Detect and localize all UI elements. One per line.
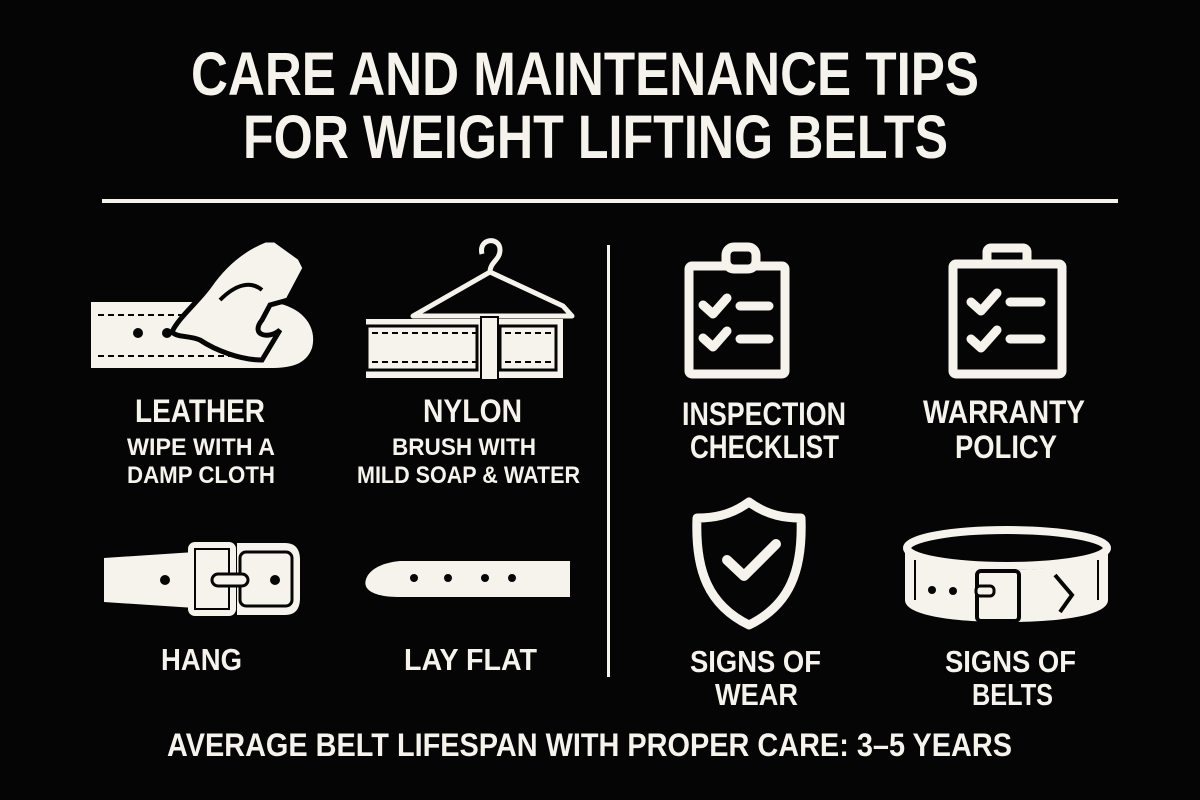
label: signs of wear <box>690 644 821 712</box>
icon: belt with buckle <box>104 543 300 615</box>
panel: signs of belts <box>905 530 1108 712</box>
panel: nylon <box>357 241 580 489</box>
label: warranty policy: WARRANTY <box>923 394 1085 430</box>
text: wipe with a damp cloth: WIPE WITH A <box>127 434 275 461</box>
title: CARE AND MAINTENANCE TIPS <box>191 40 979 108</box>
label: warranty policy <box>923 394 1085 465</box>
title <box>191 40 979 171</box>
label: nylon: NYLON <box>423 393 522 429</box>
icon: shield with check <box>697 502 801 625</box>
label: signs of belts: SIGNS OF <box>945 644 1076 679</box>
icon: belt with hand wiping <box>91 240 313 368</box>
panel: inspection checklist <box>682 247 846 465</box>
label: leather: LEATHER <box>135 393 265 429</box>
label: inspection checklist: CHECKLIST <box>690 429 839 465</box>
text: wipe with a damp cloth <box>127 434 275 489</box>
text: wipe with a damp cloth: DAMP CLOTH <box>127 462 275 489</box>
label: hang: HANG <box>161 642 242 677</box>
label: signs of belts <box>945 644 1076 712</box>
label: inspection checklist <box>682 396 846 465</box>
icon: belt on hanger <box>366 241 572 380</box>
title: FOR WEIGHT LIFTING BELTS <box>243 103 948 171</box>
text: brush with mild soap & water: MILD SOAP & WATER <box>357 462 580 489</box>
label: signs of belts: BELTS <box>972 677 1053 712</box>
icon: clipboard <box>953 248 1062 374</box>
footer: lifespan: AVERAGE BELT LIFESPAN WITH PROPER CARE: 3–5 YEARS <box>167 727 1012 763</box>
icon: rolled belt with buckle <box>905 530 1108 622</box>
panel: warranty policy <box>923 248 1085 465</box>
panel: leather <box>91 240 313 489</box>
label: signs of wear: WEAR <box>715 677 798 712</box>
icon: flat belt <box>365 561 570 597</box>
label: lay flat: LAY FLAT <box>404 642 537 677</box>
label: inspection checklist: INSPECTION <box>682 396 846 432</box>
panel: lay flat <box>365 561 570 677</box>
panel: hang <box>104 543 300 677</box>
label: signs of wear: SIGNS OF <box>690 644 821 679</box>
text: brush with mild soap & water <box>357 434 580 489</box>
panel: signs of wear <box>690 502 821 712</box>
icon: clipboard <box>689 247 785 374</box>
text: brush with mild soap & water: BRUSH WITH <box>392 434 536 461</box>
label: warranty policy: POLICY <box>955 429 1057 465</box>
